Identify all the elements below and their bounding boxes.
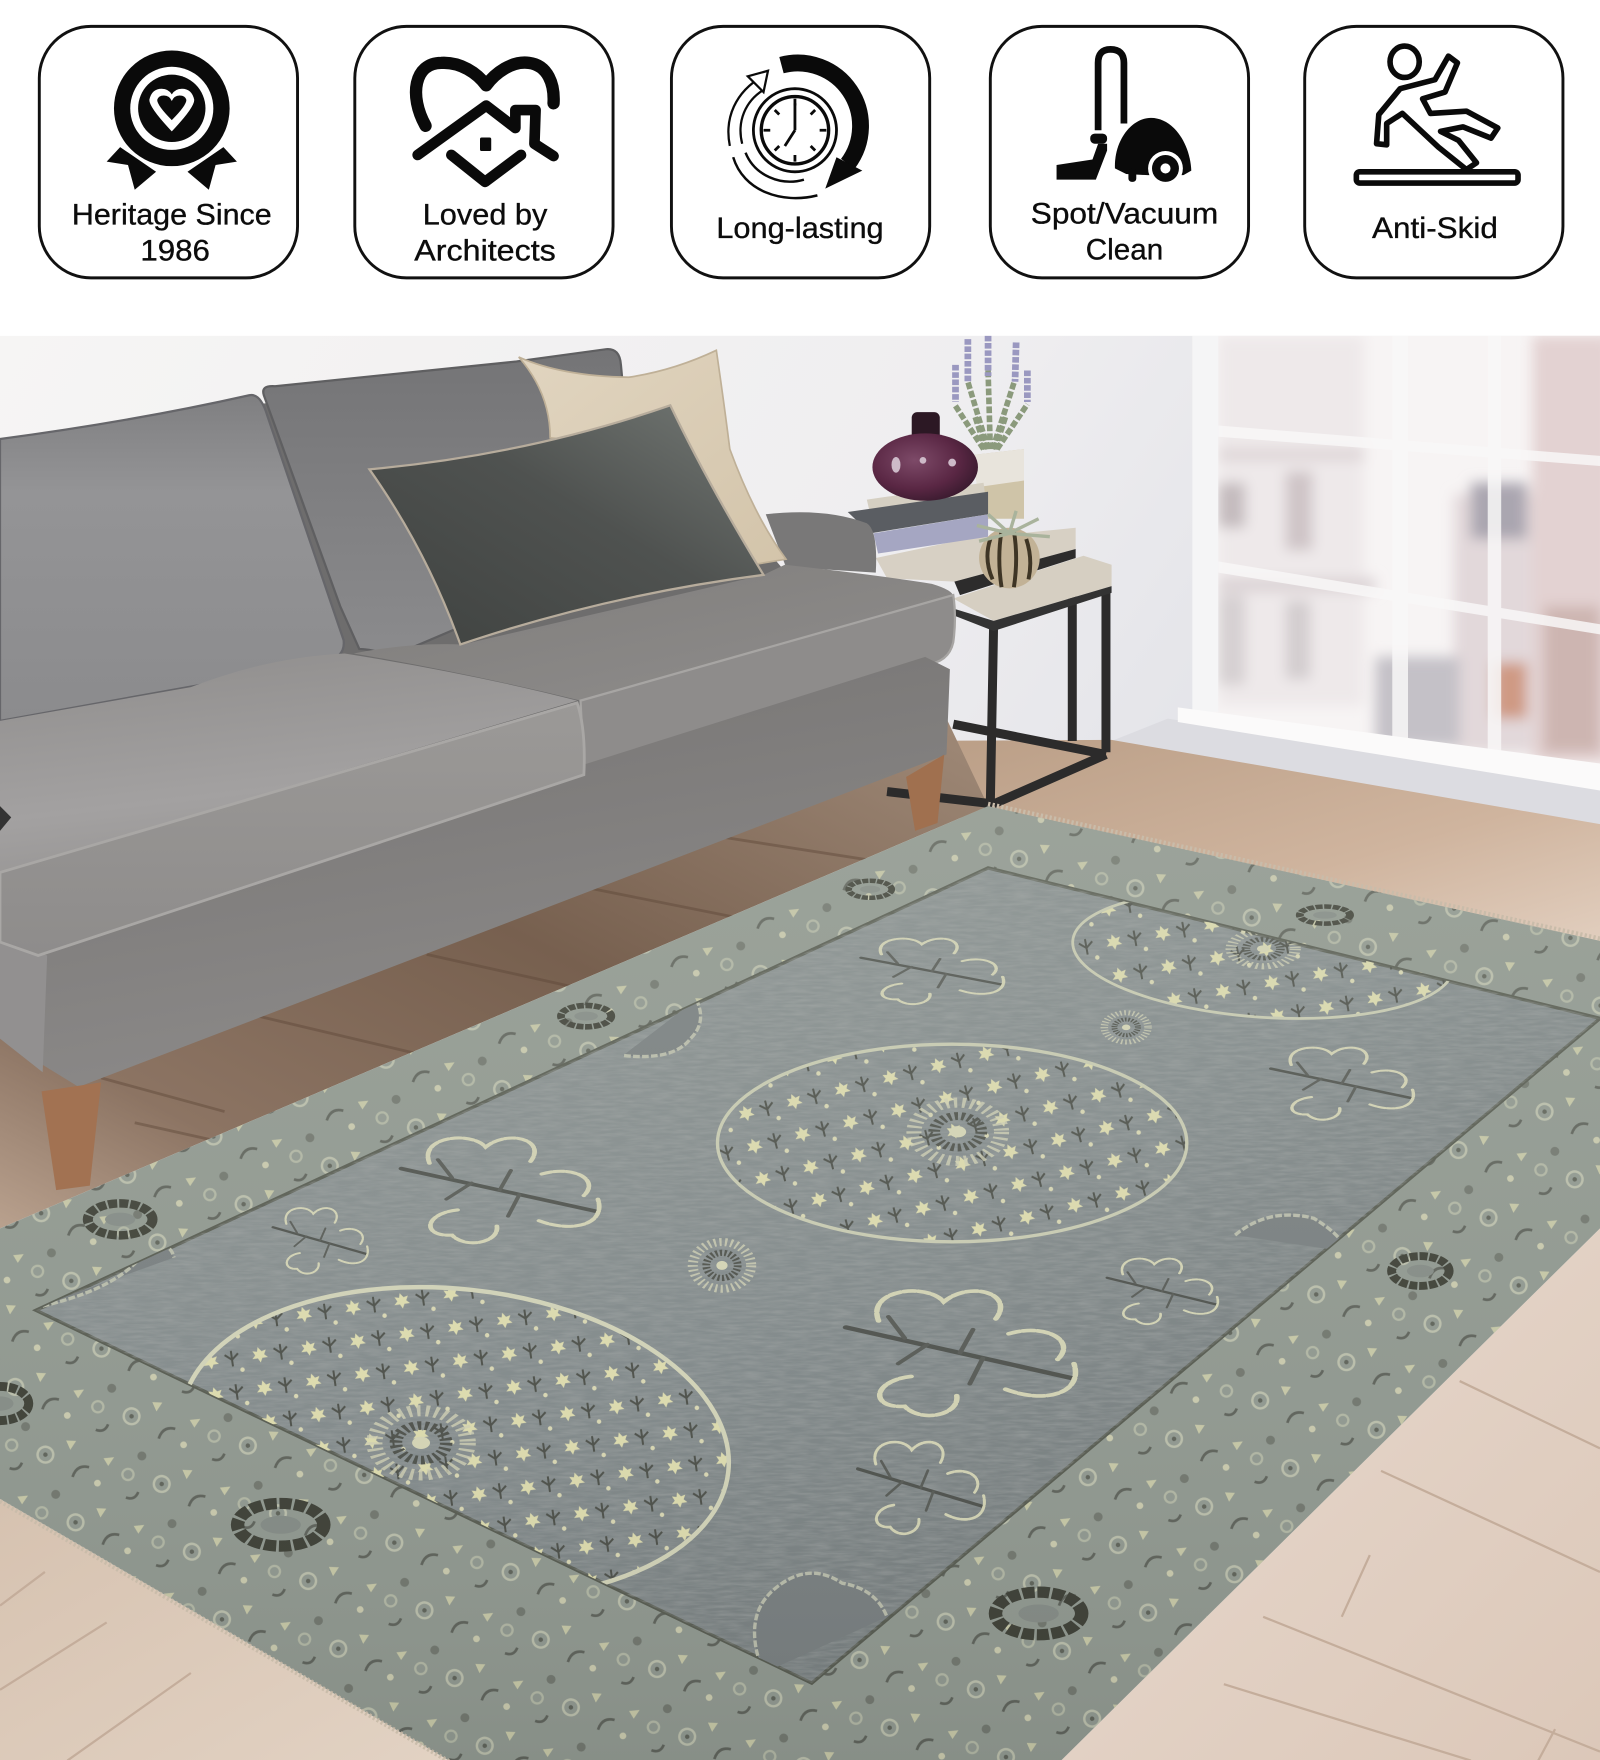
- sofa base: [0, 657, 950, 1087]
- photo: baseboard and wall shadow: [1112, 719, 1600, 825]
- icon: vacuum cleaner: [1057, 49, 1191, 186]
- rug border: [0, 806, 1600, 1760]
- plant pot: [975, 449, 1024, 519]
- medallion upper right: [1071, 901, 1450, 1020]
- card: Long-lasting: [671, 26, 930, 278]
- rug field lines: [36, 868, 1600, 1683]
- icon: award badge with heart: [107, 48, 237, 190]
- field rosettes: [693, 1013, 1148, 1289]
- label: Spot/Vacuum: Spot/Vacuum: [1031, 198, 1218, 230]
- label: Loved by: Loved by: [423, 200, 548, 232]
- dark velvet pillow: [369, 405, 764, 644]
- seat cushion left front: [0, 703, 584, 956]
- rug fringe: [0, 804, 1600, 1760]
- icon: clock with circular arrows: [728, 63, 862, 198]
- beige pillow: [519, 350, 786, 565]
- rug light shading: [0, 806, 1600, 1760]
- floor: wood upper right: [831, 740, 1600, 966]
- sofa back cushion left: [0, 395, 344, 721]
- label: Clean: Clean: [1086, 234, 1163, 266]
- side table: upper: [876, 528, 1076, 595]
- label: Heritage Since: Heritage Since: [72, 200, 272, 232]
- icon: person slipping: [1356, 46, 1518, 183]
- medallion centre: [717, 1044, 1187, 1242]
- label: Architects: Architects: [414, 235, 556, 267]
- sofa back filler: [0, 359, 954, 876]
- rug: [0, 804, 1600, 1760]
- leg right: [906, 755, 944, 831]
- seat cushion right top: [354, 565, 953, 701]
- books: [848, 483, 988, 554]
- sofa: [0, 349, 955, 1190]
- rug field: [36, 868, 1600, 1683]
- plant: lavender: [954, 336, 1027, 449]
- sofa notch: [0, 806, 11, 831]
- photo: wall background: [0, 336, 1600, 830]
- seat cushion right front: [580, 595, 955, 777]
- sofa base left corner: [0, 938, 47, 1072]
- seat cushion left top: [0, 653, 577, 872]
- white top area: [0, 0, 1600, 336]
- card: Loved by Architects: [355, 26, 613, 278]
- label: 1986: 1986: [140, 235, 210, 267]
- card: Anti-Skid: [1305, 26, 1563, 278]
- card: Heritage Since 1986: [39, 26, 298, 278]
- floor: light wood lower left: [0, 1499, 449, 1760]
- card: Spot/Vacuum Clean: [990, 26, 1249, 278]
- floor: planks under sofa: [101, 836, 898, 1168]
- icon: heart and house: [416, 63, 554, 182]
- floor: light wood lower right: [1061, 1228, 1600, 1760]
- border rosettes: [0, 881, 1449, 1635]
- floor: dark wood under sofa: [0, 719, 988, 1228]
- sofa back cushion right: [263, 349, 629, 656]
- small striped pumpkin with air plant: [977, 511, 1050, 588]
- label: Long-lasting: Long-lasting: [716, 213, 884, 245]
- photo: window sill: [1178, 707, 1600, 790]
- label: Anti-Skid: Anti-Skid: [1372, 213, 1498, 245]
- corner spandrels: [34, 999, 1347, 1673]
- sofa arm: [766, 512, 876, 573]
- vase: [872, 412, 978, 501]
- tree motifs: [273, 939, 1413, 1534]
- photo: window: [1192, 336, 1600, 774]
- medallion lower left: [188, 1284, 731, 1584]
- side table: lower: [887, 556, 1112, 804]
- rug medallions: [34, 878, 1458, 1673]
- leg left: [42, 1082, 101, 1190]
- rug border ornament: [0, 806, 1600, 1760]
